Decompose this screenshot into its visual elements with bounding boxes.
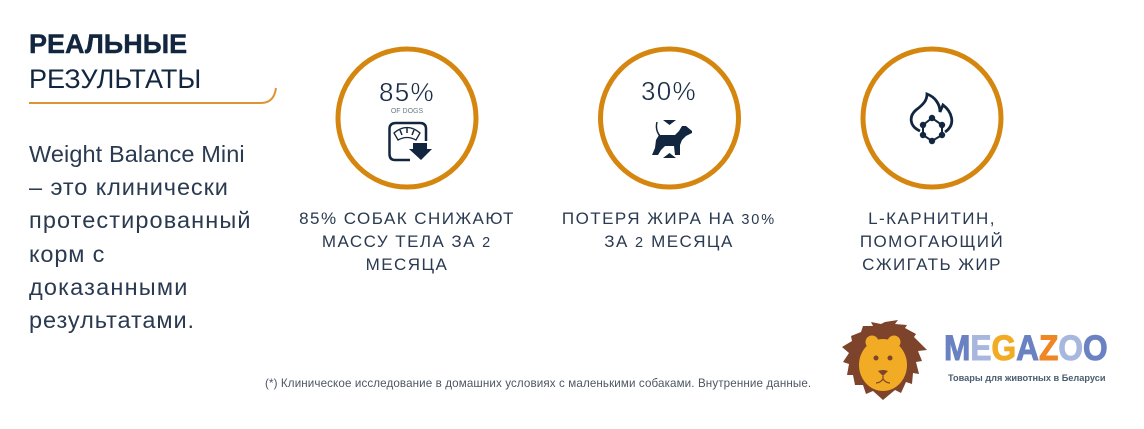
heading underline: [29, 88, 277, 104]
caption 1: 85% СОБАК СНИЖАЮТ: [299, 209, 515, 228]
stat value: 30%: [641, 76, 697, 106]
stat circle: 30%: [598, 46, 741, 190]
logo: wordmark: MEGAZOO: [944, 329, 1108, 368]
description text: – это клинически: [29, 174, 229, 200]
description text: Weight Balance Mini: [29, 141, 245, 167]
icon: dog with arrows: [652, 120, 692, 158]
logo: tagline: Товары для животных в Беларуси: [948, 373, 1106, 383]
caption 1: [299, 209, 515, 274]
description text: [29, 141, 252, 333]
stat circle: L-carnitine: [860, 46, 1004, 190]
icon: scale with down arrow: [390, 123, 435, 163]
caption 3: [860, 209, 1004, 274]
description text: протестированный: [29, 207, 252, 233]
caption 2: ПОТЕРЯ ЖИРА НА 30%: [562, 209, 776, 228]
description text: результатами.: [29, 307, 195, 333]
description text: корм с: [29, 241, 105, 267]
stat sublabel: OF DOGS: [391, 108, 423, 115]
caption 3: L-КАРНИТИН,: [868, 209, 996, 228]
heading: РЕАЛЬНЫЕ: [29, 29, 187, 59]
subheading: РЕЗУЛЬТАТЫ: [29, 64, 201, 94]
caption 1: МЕСЯЦА: [366, 255, 448, 274]
stat value: 85%: [379, 77, 435, 107]
logo: lion: [842, 320, 927, 400]
caption 2: [562, 209, 776, 251]
stat circle: 85%: [336, 46, 478, 190]
caption 1: МАССУ ТЕЛА ЗА 2: [322, 232, 492, 251]
caption 2: ЗА 2 МЕСЯЦА: [604, 232, 734, 251]
description text: доказанными: [29, 274, 189, 300]
caption 3: ПОМОГАЮЩИЙ: [860, 232, 1004, 251]
footnote: (*) Клиническое исследование в домашних условиях с маленькими собаками. Внутренние данные.: [265, 377, 811, 390]
icon: flame with molecule: [911, 94, 952, 144]
caption 3: СЖИГАТЬ ЖИР: [862, 255, 1002, 274]
